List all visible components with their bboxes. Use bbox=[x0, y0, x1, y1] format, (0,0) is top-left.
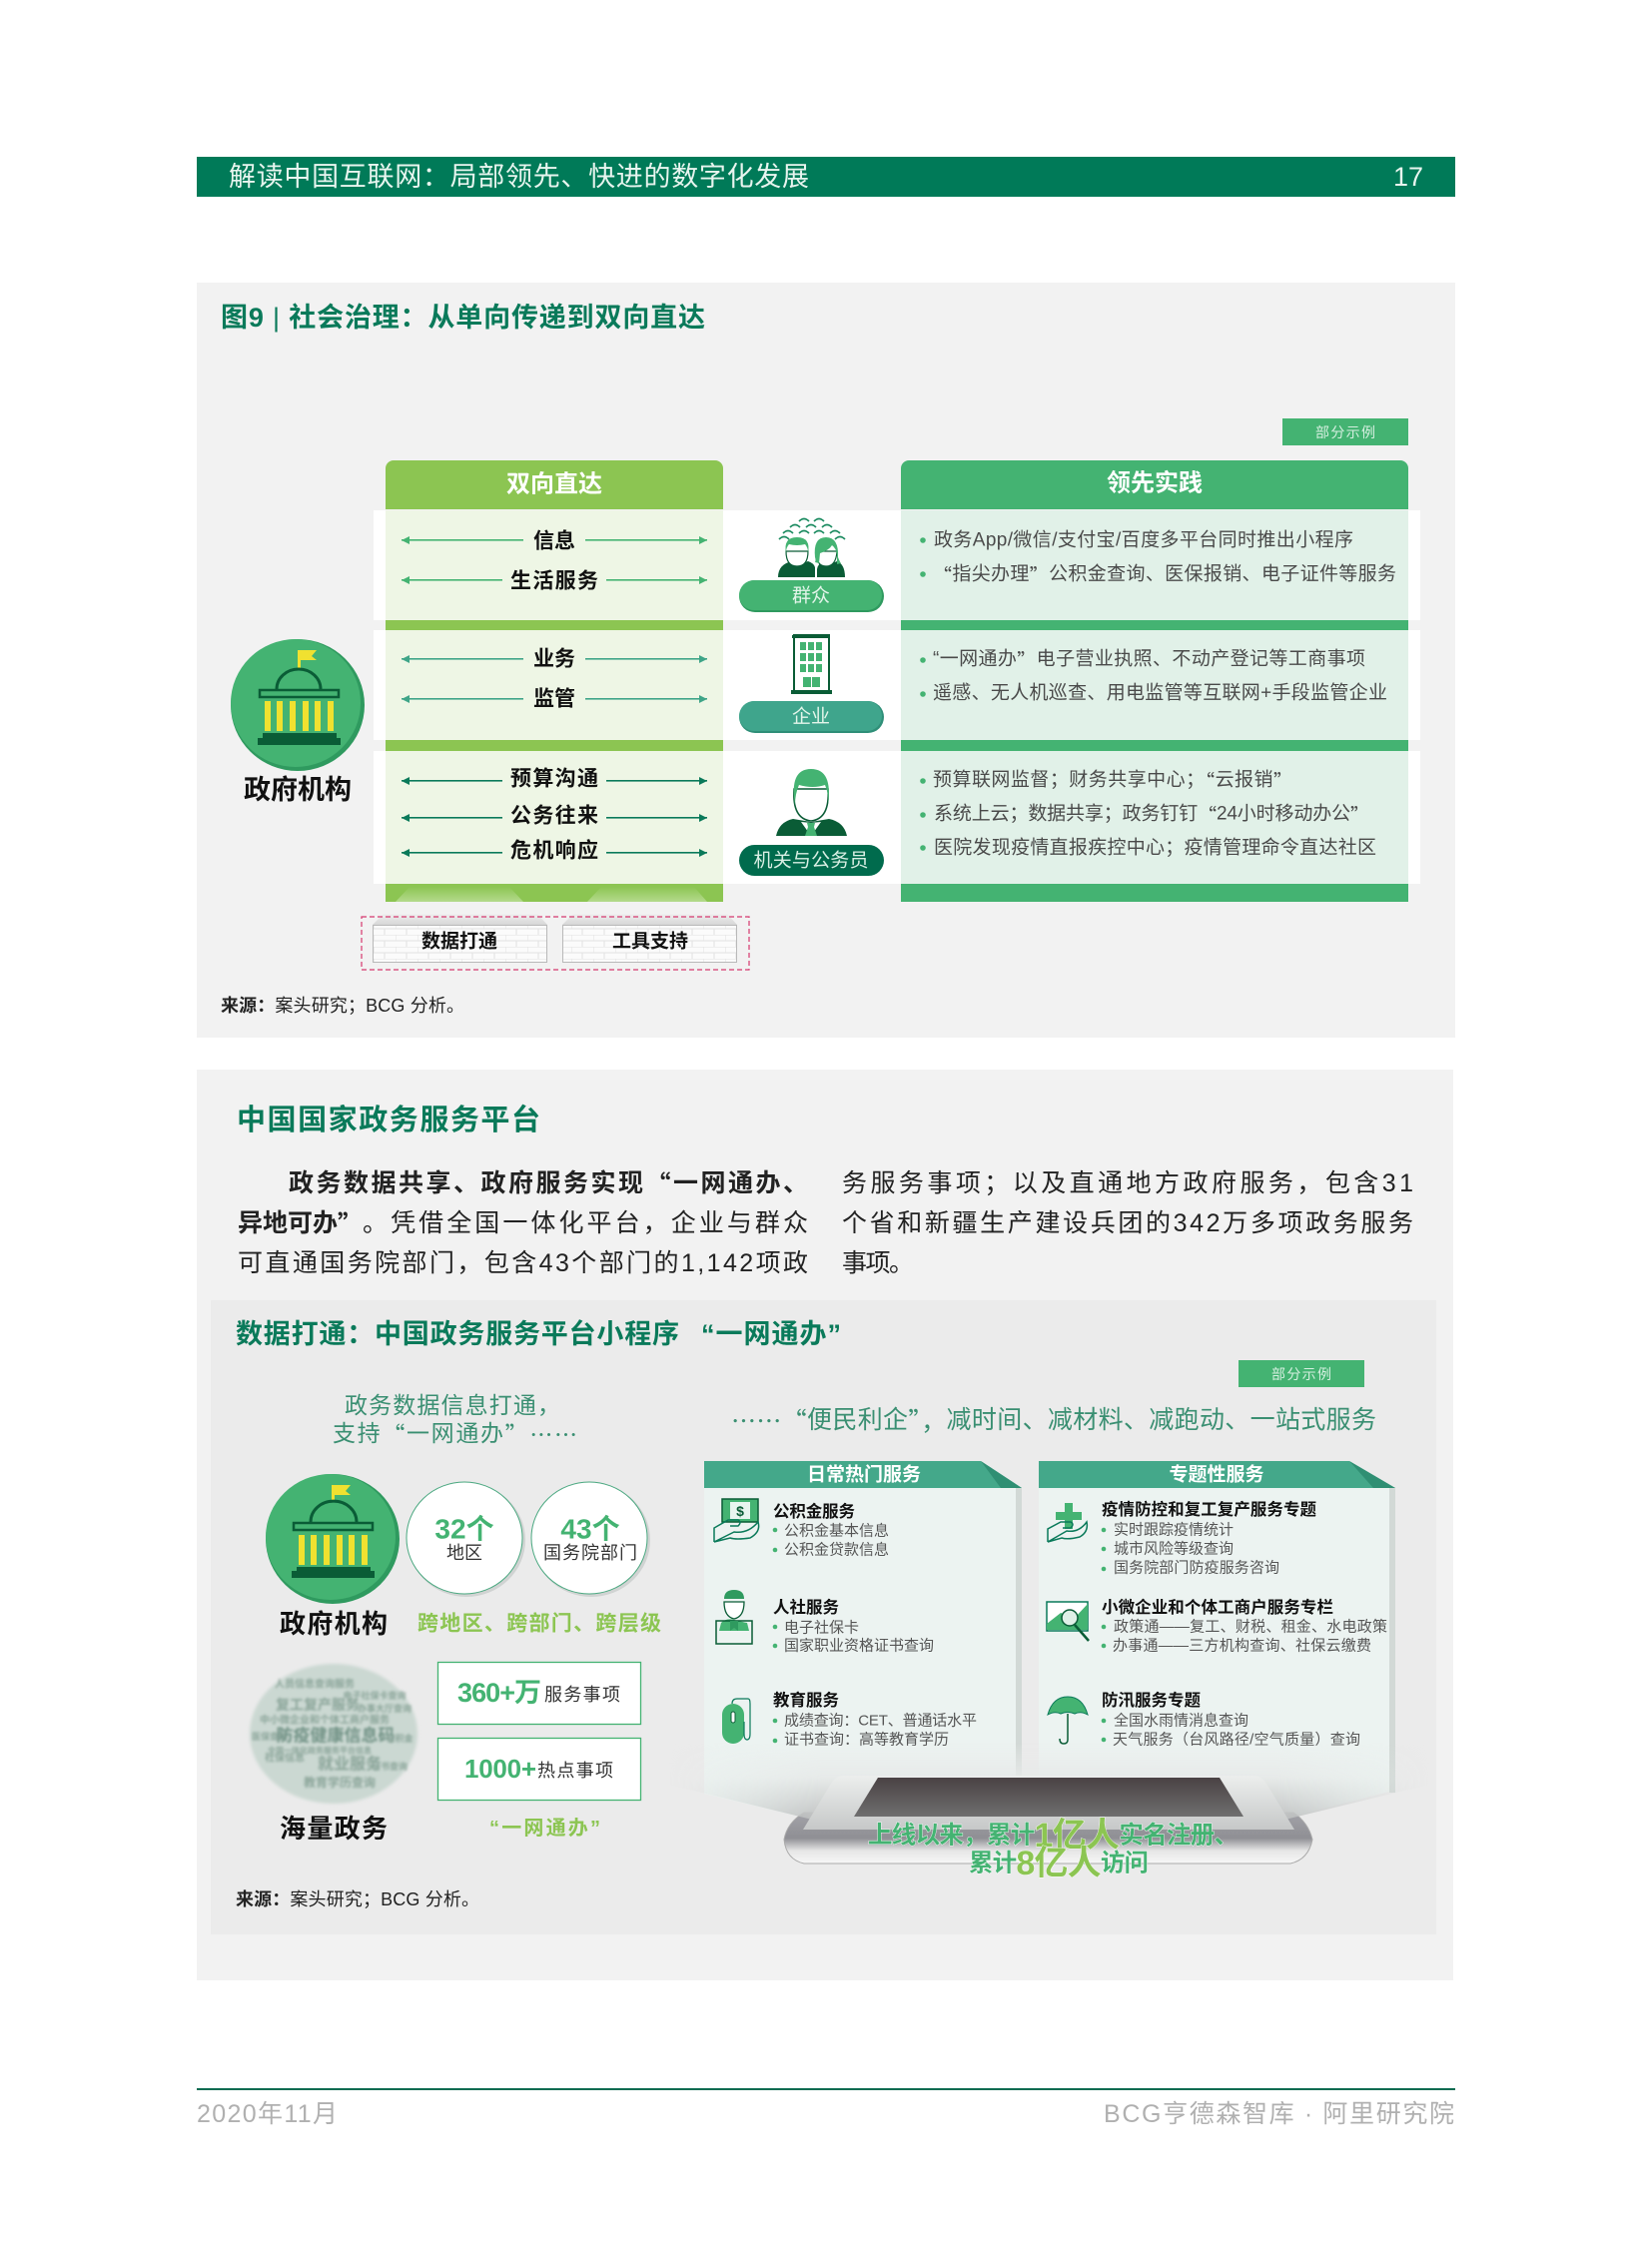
icon: crowd bbox=[778, 519, 845, 577]
tag: partial examples: 部分示例 bbox=[1315, 424, 1375, 440]
body text: 异地可办” bbox=[238, 1205, 363, 1241]
tag: partial examples bbox=[1239, 1360, 1364, 1387]
stat box: hot items: 1000+ bbox=[464, 1754, 536, 1784]
foundation: data and tools: 工具支持 bbox=[612, 931, 688, 953]
word cloud: 人员信息查询服务 bbox=[275, 1678, 355, 1690]
icon: government building bbox=[231, 639, 365, 771]
word cloud: 防疫健康信息码 bbox=[276, 1726, 396, 1746]
word cloud: 公积金 bbox=[386, 1733, 413, 1744]
card: daily services: 教育服务 bbox=[773, 1690, 839, 1710]
pill: officials bbox=[739, 845, 884, 876]
circle: departments bbox=[531, 1482, 650, 1597]
column: leading practices: 医院发现疫情直报疾控中心；疫情管理命令直达社区 bbox=[934, 837, 1376, 859]
tag: partial examples bbox=[1282, 418, 1408, 445]
stat box: services: 360+万 bbox=[457, 1678, 541, 1708]
word cloud bbox=[250, 1664, 417, 1804]
column: two-way direct: 危机响应 bbox=[510, 839, 598, 863]
column: leading practices: “指尖办理”公积金查询、医保报销、电子证件等服务 bbox=[933, 561, 1396, 587]
word cloud: 中小微企业和个体工商户服务 bbox=[260, 1714, 390, 1726]
card: topic services: 小微企业和个体工商户服务专栏 bbox=[1102, 1597, 1333, 1617]
callout: usage: 上线以来，累计1亿人实名注册、 bbox=[868, 1817, 1239, 1855]
icon: money in hand bbox=[714, 1499, 759, 1542]
sub-panel: mini program bbox=[236, 1319, 1422, 1908]
circle: regions: 32个 bbox=[434, 1514, 494, 1544]
column: two-way direct: 业务 bbox=[533, 647, 575, 671]
card: daily services: 公积金基本信息 bbox=[784, 1522, 889, 1540]
column: leading practices: “一网通办”电子营业执照、不动产登记等工商事项 bbox=[933, 645, 1365, 673]
header bar: 17 bbox=[1393, 162, 1423, 192]
column: leading practices: 领先实践 bbox=[1107, 469, 1203, 497]
phone illustration bbox=[715, 1745, 1376, 1864]
left intro: 政务数据信息打通， bbox=[345, 1392, 560, 1418]
icon: computer mouse bbox=[722, 1699, 750, 1744]
card: topic services: 防汛服务专题 bbox=[1102, 1690, 1201, 1710]
word cloud: 电子社保卡查询 bbox=[343, 1690, 407, 1701]
label: government: 政府机构 bbox=[280, 1609, 388, 1639]
card: daily services: 公积金贷款信息 bbox=[784, 1542, 889, 1558]
caption: cross-boundary: 跨地区、跨部门、跨层级 bbox=[417, 1612, 661, 1636]
icon: office building bbox=[791, 635, 832, 694]
card: daily services: 公积金服务 bbox=[773, 1501, 855, 1521]
sub-panel title: 数据打通：中国政务服务平台小程序 bbox=[236, 1318, 679, 1349]
card: topic services: 全国水雨情消息查询 bbox=[1114, 1712, 1248, 1730]
card: daily services: 国家职业资格证书查询 bbox=[784, 1638, 934, 1654]
icon: government building bbox=[266, 1474, 400, 1604]
column: leading practices: 政务App/微信/支付宝/百度多平台同时推出小程序 bbox=[934, 529, 1353, 551]
caption: one network: “一网通办” bbox=[489, 1817, 600, 1840]
icon: money in hand: $ bbox=[736, 1503, 744, 1519]
column: two-way direct: 预算沟通 bbox=[510, 767, 598, 791]
pill: enterprise bbox=[739, 701, 884, 733]
stat box: services: 服务事项 bbox=[544, 1685, 620, 1705]
callout: usage bbox=[868, 1817, 1239, 1882]
circle: regions bbox=[407, 1482, 525, 1597]
word cloud: 复工复产服务 bbox=[276, 1697, 360, 1713]
icon: chart with magnifier bbox=[1047, 1602, 1089, 1641]
source: 来源：案头研究；BCG 分析。 bbox=[221, 996, 464, 1016]
word cloud: 教育学历查询 bbox=[304, 1775, 376, 1790]
body text: 个省和新疆生产建设兵团的342万多项政务服务 bbox=[842, 1209, 1413, 1237]
column: leading practices bbox=[901, 460, 1408, 902]
word cloud: 证书查询 bbox=[372, 1761, 408, 1772]
column: leading practices: 系统上云；数据共享；政务钉钉“24小时移动办公” bbox=[934, 801, 1369, 827]
left intro: 支持“一网通办”…… bbox=[333, 1416, 577, 1450]
label: government: 政府机构 bbox=[244, 775, 352, 805]
body text: 可直通国务院部门，包含43个部门的1,142项政 bbox=[238, 1249, 808, 1277]
column: two-way direct: 双向直达 bbox=[506, 471, 602, 497]
body text: 事项。 bbox=[842, 1249, 914, 1277]
word cloud: 医保查询 bbox=[252, 1731, 288, 1742]
card: topic services: 政策通——复工、财税、租金、水电政策 bbox=[1114, 1618, 1387, 1636]
word cloud: 办事大厅查询 bbox=[358, 1703, 412, 1714]
card: daily services: 日常热门服务 bbox=[807, 1464, 921, 1486]
tag: partial examples: 部分示例 bbox=[1271, 1366, 1331, 1382]
pill: public bbox=[739, 580, 884, 612]
pill: enterprise: 企业 bbox=[792, 705, 830, 727]
card: topic services: 国务院部门防疫服务咨询 bbox=[1114, 1558, 1279, 1576]
footer: BCG亨德森智库 · 阿里研究院 bbox=[1104, 2100, 1454, 2128]
column: leading practices: 遥感、无人机巡查、用电监管等互联网+手段监管企业 bbox=[933, 681, 1387, 703]
panel: national platform bbox=[197, 1070, 1453, 1980]
body text: 政务数据共享、政府服务实现“一网通办、 bbox=[289, 1165, 808, 1201]
column: two-way direct bbox=[386, 460, 723, 902]
callout: usage: 累计8亿人访问 bbox=[969, 1845, 1149, 1882]
word cloud: 就业服务 bbox=[318, 1754, 382, 1774]
icon: umbrella bbox=[1048, 1697, 1088, 1744]
column: two-way direct: 监管 bbox=[533, 687, 575, 711]
column: two-way direct: 公务往来 bbox=[510, 805, 598, 827]
body text: 务服务事项；以及直通地方政府服务，包含31 bbox=[842, 1169, 1413, 1197]
card: topic services: 疫情防控和复工复产服务专题 bbox=[1102, 1499, 1316, 1519]
section heading: 中国国家政务服务平台 bbox=[237, 1103, 540, 1136]
card: topic services: 办事通——三方机构查询、社保云缴费 bbox=[1113, 1638, 1371, 1654]
pill: officials: 机关与公务员 bbox=[753, 849, 869, 871]
sub-panel title: “一网通办” bbox=[701, 1319, 841, 1349]
figure title: 图9 | 社会治理：从单向传递到双向直达 bbox=[221, 303, 705, 333]
word cloud: 社保信息 bbox=[265, 1752, 305, 1764]
column: two-way direct: 信息 bbox=[533, 529, 575, 553]
column: leading practices: 预算联网监督；财务共享中心；“云报销” bbox=[933, 767, 1292, 793]
header bar: 解读中国互联网：局部领先、快进的数字化发展 bbox=[229, 162, 809, 192]
stat box: services bbox=[437, 1662, 641, 1724]
arrows and labels bbox=[402, 536, 707, 584]
label: massive services: 海量政务 bbox=[280, 1814, 388, 1844]
footer: 2020年11月 bbox=[197, 2100, 338, 2128]
panel: figure 9 bbox=[197, 283, 1455, 1038]
stat box: hot items: 热点事项 bbox=[537, 1761, 613, 1781]
pill: public: 群众 bbox=[792, 585, 830, 607]
body text: 。凭借全国一体化平台，企业与群众 bbox=[363, 1209, 808, 1237]
icon: medical cross in hand bbox=[1048, 1503, 1087, 1542]
word cloud: 全国一体化政务服务平台信息 bbox=[268, 1746, 372, 1756]
source: 来源：案头研究；BCG 分析。 bbox=[236, 1889, 479, 1909]
icon: worker with parcel bbox=[716, 1590, 752, 1644]
body text bbox=[238, 1165, 1413, 1277]
card: daily services bbox=[704, 1461, 1022, 1830]
icon: civil servant bbox=[776, 769, 847, 836]
card: topic services: 城市风险等级查询 bbox=[1114, 1540, 1234, 1558]
footer bbox=[197, 2088, 1455, 2128]
header bar bbox=[197, 157, 1455, 197]
stat box: hot items bbox=[437, 1738, 641, 1800]
column: two-way direct: 生活服务 bbox=[510, 569, 598, 593]
card: topic services: 专题性服务 bbox=[1169, 1464, 1264, 1486]
card: topic services: 天气服务（台风路径/空气质量）查询 bbox=[1113, 1732, 1360, 1748]
left intro bbox=[333, 1392, 577, 1450]
foundation: data and tools: 数据打通 bbox=[421, 931, 497, 953]
white row bands bbox=[374, 510, 1420, 884]
circle: departments: 43个 bbox=[560, 1514, 620, 1544]
circle: regions: 地区 bbox=[446, 1543, 482, 1563]
foundation: data and tools bbox=[362, 914, 749, 970]
right intro: ……“便民利企”，减时间、减材料、减跑动、一站式服务 bbox=[731, 1402, 1376, 1438]
card: daily services: 人社服务 bbox=[773, 1597, 839, 1617]
circle: departments: 国务院部门 bbox=[543, 1543, 637, 1563]
card: daily services: 电子社保卡 bbox=[784, 1620, 859, 1636]
card: topic services bbox=[1039, 1461, 1395, 1830]
card: daily services: 证书查询：高等教育学历 bbox=[784, 1730, 949, 1748]
card: daily services: 成绩查询：CET、普通话水平 bbox=[784, 1712, 977, 1730]
card: topic services: 实时跟踪疫情统计 bbox=[1114, 1522, 1234, 1538]
